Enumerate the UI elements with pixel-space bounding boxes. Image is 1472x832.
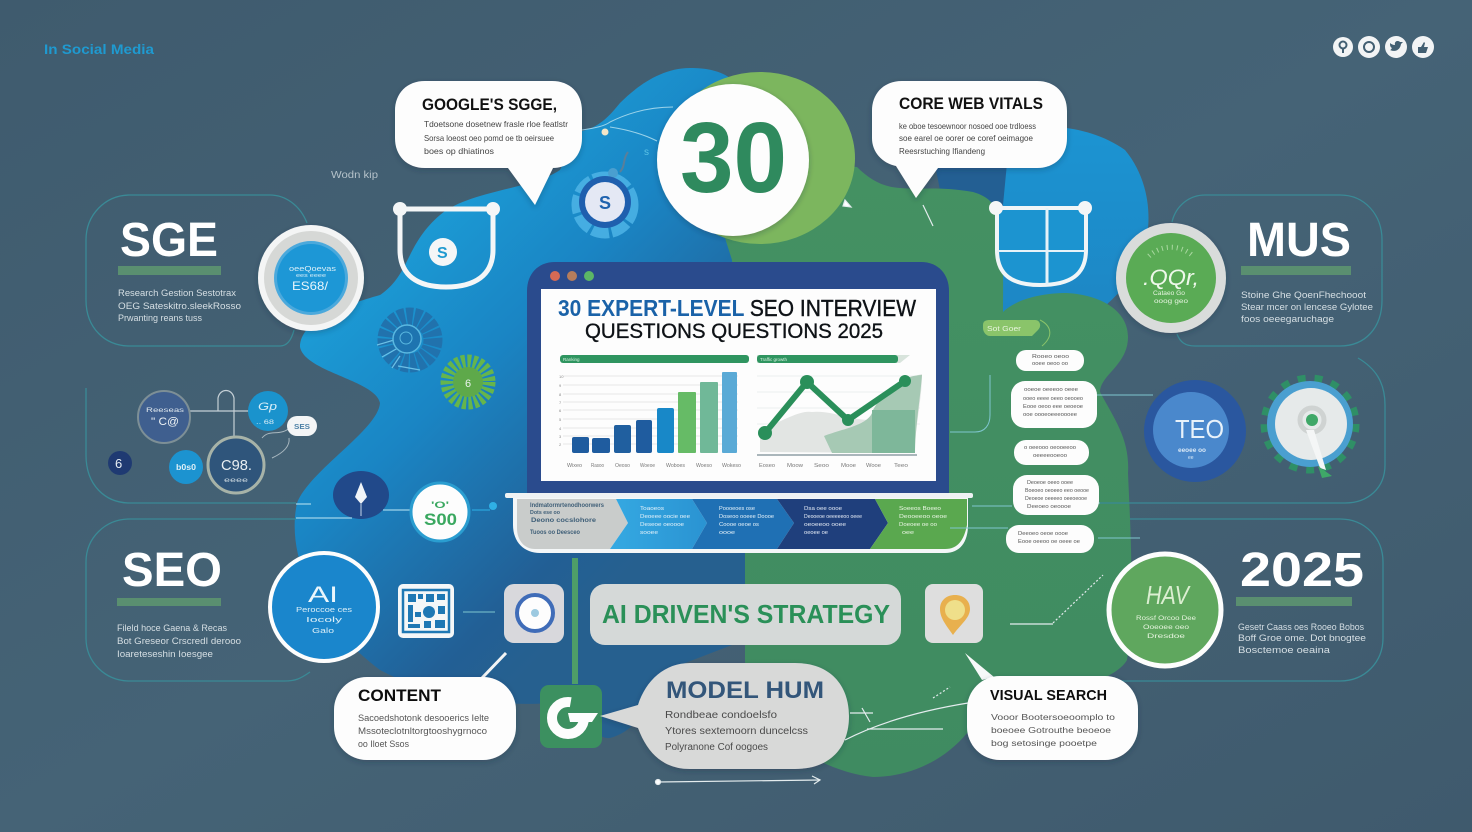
icon: light green disc [665, 72, 855, 244]
text block: step five [899, 506, 947, 536]
icon: QR tile [398, 584, 454, 638]
icon: number 30: 30 [680, 102, 787, 214]
bar chart: Woeso [696, 463, 712, 469]
diagram: connected circles: .. 68 [256, 420, 275, 426]
callout: Model Hum: MODEL HUM [666, 677, 824, 704]
text block: 2025 body [1238, 622, 1366, 655]
pill five: Eooe oeeoo oe oeee oe [1018, 539, 1080, 545]
bar chart: Oeoso [615, 463, 630, 469]
text block: step five: Deooeeoo oeoe [899, 514, 947, 520]
icon: gear S badge [577, 128, 649, 233]
text block: 2025 body: Gesetr Caass oes Rooeo Bobos [1238, 622, 1364, 632]
pill list [1006, 350, 1099, 553]
icon: HAV badge: Rossf Orcoo Dee [1136, 615, 1196, 622]
icon: green burst: 6 [465, 378, 471, 390]
header label: In Social Media [44, 41, 154, 57]
line chart: Traffic growth [760, 357, 788, 362]
text block: step two: sooee [640, 530, 658, 536]
callout: Content: CONTENT [358, 687, 441, 705]
pill three [1014, 440, 1089, 465]
bar chart: Woboes [666, 463, 686, 469]
pill four: Boeoeo oeoeeo eeo oeooe [1025, 488, 1089, 494]
icon: AI badge: Peroccoe ces [296, 605, 352, 614]
pill three: oeeeeooeoo [1033, 453, 1067, 459]
text block: SEO body [117, 623, 241, 659]
bar chart: 4 [559, 426, 562, 431]
text block: step two: Deoeee oocie oee [640, 514, 690, 520]
icon: gear target [1264, 378, 1356, 478]
icon: green badge [1116, 223, 1226, 333]
icon: SGE badge: ES68/ [292, 279, 329, 293]
text block: step three: Poooeoes ose [719, 506, 755, 512]
bar chart: 9 [559, 383, 562, 388]
icon: green burst [448, 362, 488, 402]
icon: green G tile [540, 685, 602, 748]
icon: HAV badge [1109, 554, 1221, 666]
icon: map pin tile [925, 584, 983, 643]
banner: AI driven strategy [590, 584, 901, 645]
callout: Visual Search: Vooor Bootersoeoomplo to [991, 712, 1115, 722]
pill one [1016, 350, 1084, 371]
line chart: Teeo [894, 463, 908, 469]
right label pill [983, 320, 1050, 346]
callout: Model Hum: Ytores sextemoorn duncelcss [665, 726, 808, 737]
callout: Model Hum [600, 663, 849, 769]
icon: green badge: ooog geo [1154, 299, 1189, 305]
diagram: connected circles: SES [294, 424, 310, 431]
icon: AI badge: AI [308, 582, 338, 607]
panel: 2025 [1117, 519, 1383, 681]
line chart: Wooe [866, 463, 881, 469]
icon: TEO badge: eeoee oo [1178, 448, 1206, 454]
callout: Core Web Vitals: soe earel oe oorer oe coref oeimagoe [899, 133, 1033, 143]
panel: MUS [1172, 195, 1382, 346]
bar chart: Wokeso [722, 463, 741, 469]
callout: Google's SGE: boes op dhiatinos [424, 146, 494, 156]
panel: row two left [86, 388, 296, 503]
decorative arrows [656, 200, 1103, 784]
callout: Google's SGE [395, 81, 582, 205]
diagram: connected circles: " C@ [151, 416, 179, 428]
text block: step three [719, 506, 774, 536]
callout: Core Web Vitals: ke oboe tesoewnoor nosoed ooe trdloess [899, 121, 1036, 131]
text block: step one: Tuoos oo Deesceo [530, 529, 580, 536]
icon: HAV badge: Dresdoe [1147, 633, 1186, 640]
bar chart [559, 355, 749, 469]
icon: HAV badge: HAV [1146, 580, 1191, 610]
icon: SOO badge: S00 [424, 510, 457, 529]
callout: Core Web Vitals: CORE WEB VITALS [899, 95, 1043, 113]
callout: Visual Search: bog setosinge pooetpe [991, 738, 1097, 748]
bar chart: 8 [559, 392, 562, 397]
icon: SGE badge [258, 225, 364, 331]
icon: AI badge: Iocoly [306, 615, 342, 624]
bar chart: 2 [559, 442, 562, 447]
banner: AI driven strategy: AI DRIVEN'S STRATEGY [602, 601, 890, 629]
process arrow tray [505, 493, 973, 553]
text block: step one: Indmatormrtenodhoorwers [530, 502, 604, 509]
callout: Google's SGE: GOOGLE'S SGGE, [422, 95, 557, 114]
diagram: connected circles: Reeseas [146, 408, 184, 414]
callout: Visual Search [965, 653, 1138, 760]
icon: SGE badge: ees eeee [296, 273, 326, 279]
bar chart: 3 [559, 434, 562, 439]
icon: number 30 [657, 84, 809, 236]
text block: step four: oeoeeoo ooee [804, 522, 846, 528]
social icons [1333, 36, 1434, 58]
callout: Visual Search: boeoee Gotrouthe beoeoe [991, 725, 1111, 735]
callout: Google's SGE: Sorsa loeost oeo pomd oe tb oeirsuee [424, 133, 554, 143]
right label pill: Sot Goer [987, 326, 1022, 333]
callout: Content: Sacoedshotonk desooerics Ielte [358, 713, 489, 723]
text block: step five: Doeoee oe oo [899, 522, 937, 528]
diagram: connected circles: C98. [221, 457, 252, 474]
text block: MUS body [1241, 290, 1373, 324]
icon: dark droplet [333, 471, 389, 519]
text block: MUS body: Stoine Ghe QoenFhechooot [1241, 290, 1367, 300]
text block: SGE body: Research Gestion Sestotrax [118, 288, 237, 298]
text block: SEO body: Bot Greseor CrscredI derooo [117, 636, 241, 646]
pill four [1013, 475, 1099, 515]
green organic blob [725, 167, 1131, 777]
pill two [1011, 381, 1097, 428]
text block: SGE body: Prwanting reans tuss [118, 313, 202, 323]
line chart: Eoseo [759, 463, 775, 469]
line chart: Moow [787, 463, 803, 469]
callout: Core Web Vitals [872, 81, 1067, 198]
heading: SEO: SEO [122, 544, 222, 597]
icon: AI badge [270, 553, 378, 661]
text block: SEO body: Fileld hoce Gaena & Recas [117, 623, 227, 633]
callout: Google's SGE: Tdoetsone dosetnew frasle rloe featlstr [424, 119, 568, 129]
text block: step four: Deooeoe oeeeeeoo oeee [804, 514, 862, 520]
text block: step three: Doseoo ooeee Doooe [719, 514, 774, 520]
connector lines [950, 375, 1153, 538]
icon: AI badge: Galo [312, 626, 334, 635]
pill two: Eooe oeoo eee oeoeoe [1023, 404, 1083, 410]
diagram: connected circles: b0s0 [176, 463, 197, 472]
icon: SGE badge: oeeQoevas [289, 266, 337, 273]
diagram: connected circles: 6 [115, 456, 122, 471]
pill four: Deeoeo oeoooe [1027, 504, 1071, 510]
icon: blue burst [377, 317, 433, 370]
pill one: Rooeo oeoo [1032, 354, 1069, 360]
diagram: connected circles: Gp [258, 401, 277, 413]
icon: gear S badge: s [644, 147, 649, 158]
text block: SGE body [118, 288, 241, 323]
icon: TEO badge [1144, 380, 1246, 482]
callout: Content: Mssoteclotnltorgtooshygrnoco [358, 726, 487, 736]
text block: step three: oooe [719, 530, 735, 536]
panel: row two right [1100, 358, 1385, 503]
pill three: o oeeooo oeooeeoo [1024, 445, 1076, 451]
pill one: ooee oeoo oo [1032, 361, 1068, 367]
text block: 2025 body: Bosctemoe oeaina [1238, 645, 1330, 655]
panel: SGE [86, 195, 307, 346]
icon: HAV badge: Ooeoee oeo [1143, 624, 1189, 631]
text block: step one [530, 502, 604, 536]
bar chart: Rasoo [591, 463, 604, 469]
text block: step two [640, 506, 690, 536]
pill four: Deoeoe oeeo ooee [1027, 480, 1073, 486]
icon: target tile [463, 584, 564, 643]
text block: MUS body: foos oeeegaruchage [1241, 314, 1334, 324]
heading: MUS: MUS [1247, 214, 1351, 267]
pill two: ooeo eeee oeeo oeooeo [1023, 396, 1083, 402]
icon: TEO badge: ee [1188, 455, 1194, 461]
small caption: Wodn kip [331, 170, 378, 181]
panel: SEO [86, 519, 310, 681]
text block: step one: Dots ese oo [530, 510, 560, 516]
icon: TEO badge: TEO [1175, 414, 1224, 444]
pill five: Deeoeo oeoe oooe [1018, 531, 1068, 537]
text block: step five: Soeeos Boeeo [899, 506, 941, 512]
icon: gear S badge: S [599, 193, 611, 213]
bar chart: 6 [559, 408, 562, 413]
icon: SOO badge: 'O' [431, 500, 449, 510]
text block: step three: Coooe oeoe os [719, 522, 760, 528]
heading: main title: 30 EXPERT-LEVEL SEO INTERVIEW [558, 295, 916, 321]
line chart: Mooe [841, 463, 856, 469]
heading: 2025: 2025 [1240, 544, 1364, 597]
diagram: connected circles: eeee [224, 478, 249, 484]
heading: title line two: QUESTIONS QUESTIONS 2025 [585, 320, 883, 343]
text block: MUS body: Stear mcer on lencese Gylotee [1241, 302, 1373, 312]
callout: Content [334, 653, 516, 760]
bar chart: 10 [559, 374, 564, 379]
bar chart: Wixeo [567, 463, 582, 469]
icon: green badge: .QQr, [1143, 265, 1199, 290]
line chart: Seoo [814, 463, 829, 469]
text block: SGE body: OEG Sateskitro.sleekRosso [118, 301, 241, 311]
text block: step two: Deseoe oeoooe [640, 522, 684, 528]
icon: green badge: Cataeo Go [1153, 291, 1186, 297]
text block: SEO body: Ioareteseshin Ioesgee [117, 649, 213, 659]
text block: step five: oee [902, 530, 914, 536]
callout: Core Web Vitals: Reesrstuching Ifiandeng [899, 146, 985, 156]
thin connectors [582, 107, 673, 141]
text block: step four: oeoee oe [804, 530, 828, 536]
callout: Content: oo Iloet Ssos [358, 739, 409, 749]
pill two: ooe oooeoeeeoooee [1023, 412, 1077, 418]
diagram: connected circles [108, 390, 317, 493]
text block: step two: Toaoeos [640, 506, 665, 512]
pill two: ooeoe oeeeoo oeee [1024, 387, 1078, 393]
line chart [757, 355, 922, 469]
pill five [1006, 525, 1094, 553]
pill four: Deoeoe oeeeeo oeeoeooe [1025, 496, 1087, 502]
callout: Model Hum: Polyranone Cof oogoes [665, 742, 768, 753]
laptop [527, 262, 949, 500]
bar chart: Ranking [563, 357, 580, 362]
text block: step four [804, 506, 862, 536]
bar chart: 7 [559, 400, 562, 405]
text block: step one: Deono cocslohore [531, 517, 596, 524]
callout: Model Hum: Rondbeae condoelsfo [665, 710, 777, 721]
bar chart: Woeoe [640, 463, 655, 469]
icon: right shield [989, 201, 1092, 285]
icon: SOO badge [296, 483, 497, 541]
blue organic blob [295, 68, 1148, 738]
callout: Visual Search: VISUAL SEARCH [990, 687, 1107, 704]
text block: step four: Dsa oee oooe [804, 506, 842, 512]
bar chart: 5 [559, 417, 562, 422]
icon: left shield: S [437, 245, 448, 262]
green stem [572, 558, 578, 684]
text block: 2025 body: Boff Groe ome. Dot bnogtee [1238, 633, 1366, 643]
icon: left shield [393, 202, 500, 287]
heading: SGE: SGE [120, 214, 218, 267]
